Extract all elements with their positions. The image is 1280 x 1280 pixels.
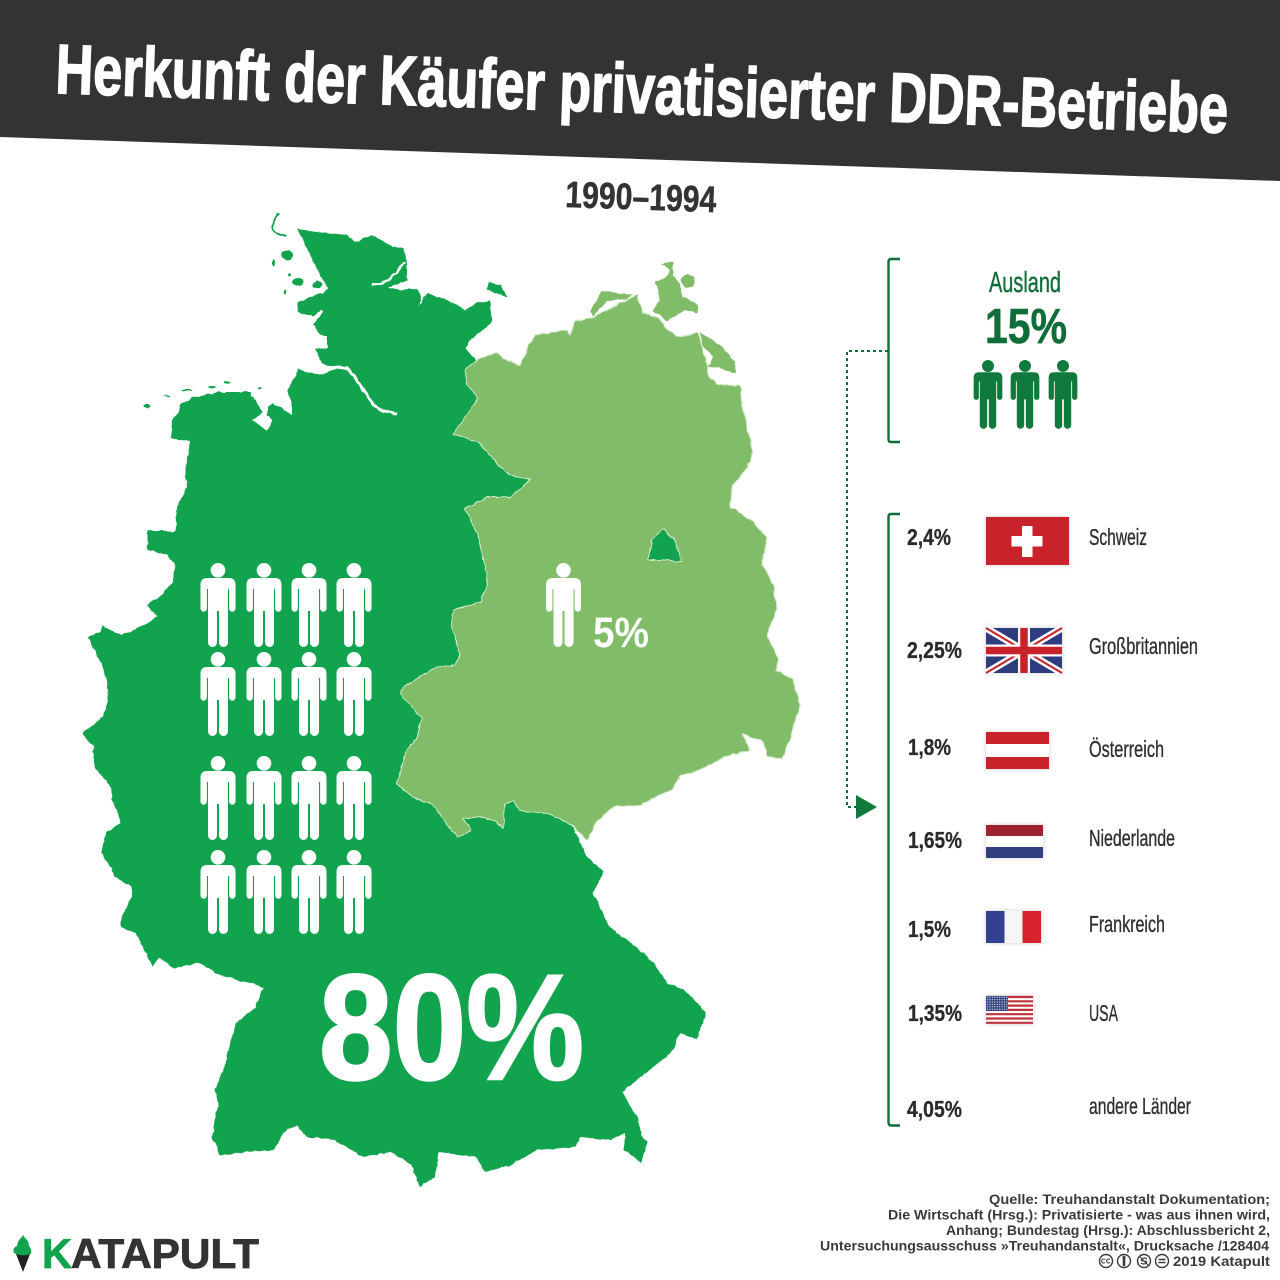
icon: ice cream (13, 1235, 31, 1272)
icons: Creative Commons (1100, 1254, 1168, 1268)
pictogram: 1 person East (546, 563, 581, 647)
value: 5%: 5% (593, 609, 649, 657)
value: 80%: 80% (319, 943, 584, 1111)
flag: USA (986, 996, 1033, 1024)
row: Österreich: Österreich (1089, 736, 1164, 762)
map of Germany (82, 213, 800, 1187)
row: Großbritannien: Großbritannien (1089, 633, 1198, 659)
row: andere Länder: 4,05% (907, 1096, 962, 1122)
bracket: Ausland (888, 259, 900, 442)
logo: KATAPULT: K (42, 1230, 72, 1277)
map region: East Germany (397, 262, 800, 841)
source text: 2019 Katapult (1173, 1253, 1270, 1269)
row: USA: 1,35% (908, 1000, 962, 1026)
bracket: countries (888, 514, 900, 1126)
row: Schweiz: 2,4% (907, 524, 951, 550)
row: Frankreich: Frankreich (1089, 911, 1165, 937)
row: Niederlande: Niederlande (1089, 825, 1175, 851)
river Elbe (325, 368, 398, 414)
heading: Ausland: Ausland (989, 267, 1061, 299)
arrow (856, 795, 877, 819)
source text (820, 1191, 1270, 1269)
row: Österreich (908, 732, 1164, 769)
value: 15%: 15% (985, 300, 1067, 354)
row: andere Länder: andere Länder (1089, 1093, 1191, 1119)
subtitle: period: 1990–1994 (565, 174, 717, 220)
row: Niederlande (908, 825, 1175, 858)
flag: Frankreich (986, 911, 1041, 943)
logo: KATAPULT: ATAPULT (71, 1230, 259, 1277)
header band (0, 0, 1280, 181)
pictogram: 3 people Ausland (974, 360, 1077, 429)
row: Großbritannien: 2,25% (907, 637, 962, 663)
row: Frankreich (908, 911, 1165, 943)
source text: Untersuchungsausschuss »Treuhandanstalt«, Drucksache /128404 (820, 1238, 1269, 1254)
map region: Berlin (648, 529, 682, 562)
row: andere Länder (907, 1093, 1191, 1122)
flag: Schweiz (986, 517, 1069, 565)
pictogram: 16 people West (200, 563, 372, 934)
row: Niederlande: 1,65% (908, 827, 962, 853)
flag: Österreich (986, 732, 1049, 769)
row: Österreich: 1,8% (908, 734, 951, 760)
Schlei inlet (372, 262, 405, 285)
row: Schweiz: Schweiz (1089, 524, 1147, 550)
source text: Quelle: Treuhandanstalt Dokumentation; (989, 1191, 1270, 1207)
flag: Niederlande (986, 825, 1043, 858)
source text: Anhang; Bundestag (Hrsg.): Abschlussbericht 2, (946, 1222, 1270, 1238)
map region: West Germany (82, 213, 706, 1187)
row: Großbritannien (907, 628, 1198, 673)
row: Schweiz (907, 517, 1147, 565)
dotted connector (847, 351, 888, 807)
row: Frankreich: 1,5% (908, 916, 951, 942)
flag: Großbritannien (986, 628, 1062, 673)
source text: Die Wirtschaft (Hrsg.): Privatisierte - was aus ihnen wird, (888, 1206, 1270, 1222)
row: USA (908, 996, 1118, 1026)
row: USA: USA (1089, 1000, 1118, 1026)
